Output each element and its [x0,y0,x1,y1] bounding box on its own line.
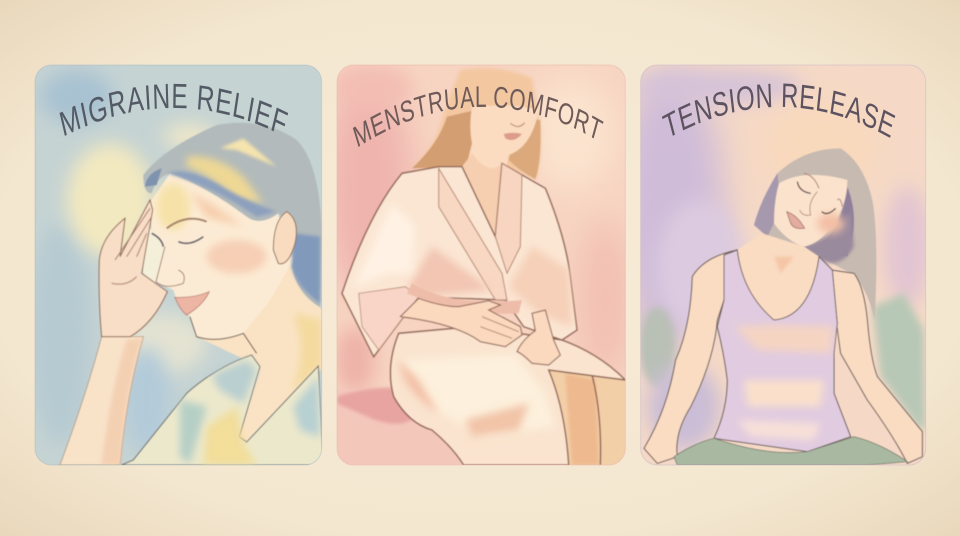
smile [175,292,209,315]
ear [273,212,296,264]
heading: migraine relief: MIGRAINE RELIEF [60,84,288,136]
pale gap behind hand [142,228,165,282]
arm and hand on abdomen [400,298,522,347]
panel 2 edge [337,65,625,465]
panel 2 watercolor wash [337,65,626,390]
belt [407,283,522,314]
face and neck [465,106,539,180]
hand [99,200,167,337]
figure: woman with head tilted, eyes closed [644,148,922,465]
hair [143,123,322,307]
heading: tension release: TENSION RELEASE [662,84,896,138]
panel: menstrual comfort [336,64,626,466]
panel 1 edge [35,65,322,465]
robe top [342,163,577,357]
seat [338,405,462,464]
figure: woman with hand on temple [60,123,323,465]
shirt [122,355,323,465]
panel: tension release [640,64,926,466]
figure: woman in robe holding abdomen [337,68,625,465]
hair [412,68,541,179]
face lines [167,219,207,228]
panel 3 watercolor wash [617,65,931,465]
panel 3 edge [641,65,926,465]
neck and chest [737,233,821,323]
arm [60,337,143,465]
heading: menstrual comfort: MENSTRUAL COMFORT [352,86,604,147]
second hand [517,310,560,365]
face [774,175,847,247]
face [152,173,293,339]
panel 1 watercolor wash [30,65,322,465]
tank top [714,250,851,452]
lower robe [390,327,625,465]
crossed legs [674,437,907,465]
panel: migraine relief [34,64,322,466]
hair back [768,148,877,318]
neck and chest [197,260,322,443]
closed eyes, nose and mouth [797,182,836,214]
right arm [831,270,922,463]
left arm [644,250,737,463]
legs [549,368,625,465]
